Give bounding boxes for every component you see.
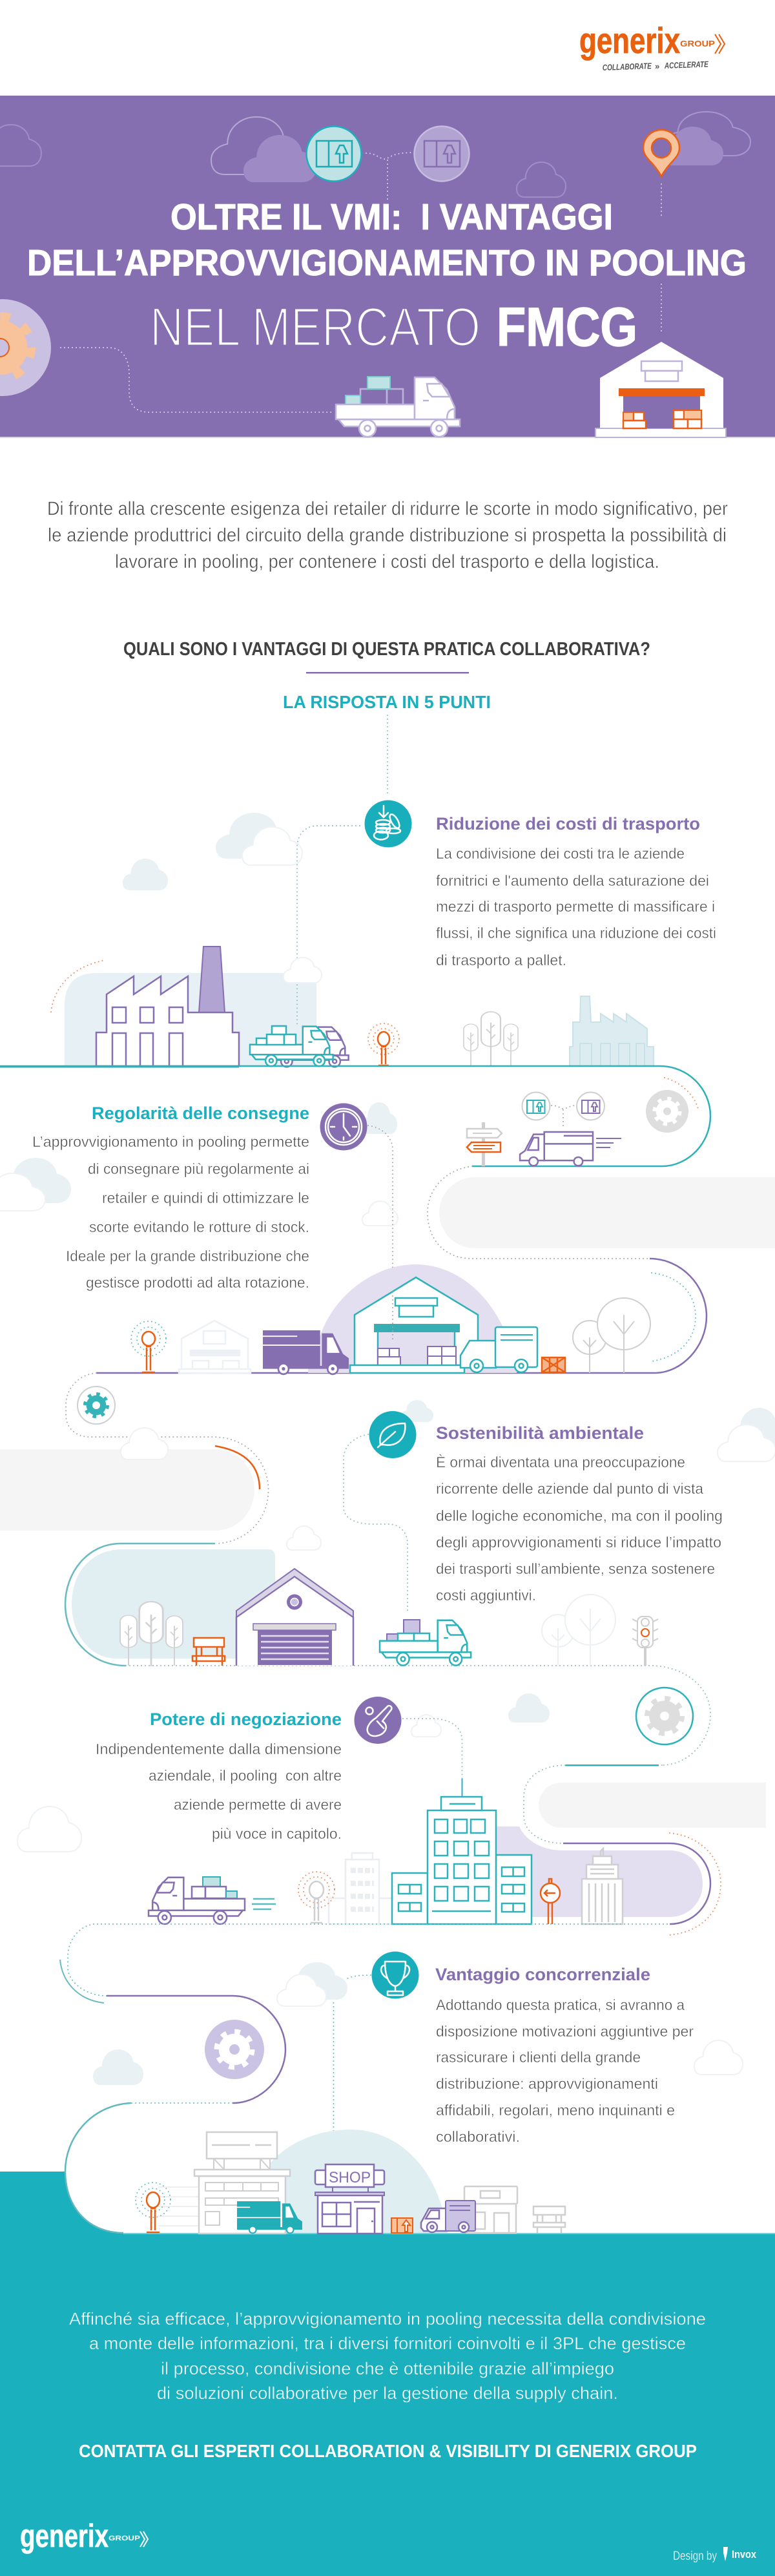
clouds [123, 813, 302, 890]
point 1 icon [364, 800, 412, 848]
point 1 text: di trasporto a pallet. [436, 952, 566, 969]
lamp [131, 1321, 166, 1372]
teal delivery truck [460, 1327, 537, 1372]
scene 2 lower: warehouse [131, 1264, 650, 1374]
header truck [336, 377, 460, 437]
call to action: CONTATTA GLI ESPERTI COLLABORATION & VISIBILITY DI GENERIX GROUP [79, 2441, 697, 2461]
logo top [579, 20, 725, 72]
teal van [237, 2201, 302, 2233]
point 2 icon [320, 1104, 367, 1150]
closing paragraph [69, 2309, 706, 2403]
gray pill [439, 1177, 775, 1248]
round trees [573, 1298, 650, 1373]
shop [315, 2164, 384, 2234]
outline van [520, 1132, 593, 1166]
signpost [467, 1122, 502, 1166]
road 1 [0, 1066, 710, 1166]
point 5 text: Adottando questa pratica, si avranno a [436, 1996, 685, 2013]
point 1 text: mezzi di trasporto permette di massificare i [436, 898, 715, 915]
footer logo: generix [20, 2518, 108, 2554]
lilac box circle [415, 127, 469, 181]
footer teal panel [0, 2103, 775, 2576]
point 3 heading: Sostenibilità ambientale [436, 1423, 644, 1443]
title: OLTRE IL VMI: I VANTAGGI [170, 196, 613, 238]
point 5 heading: Vantaggio concorrenziale [435, 1965, 650, 1984]
point 4 heading: Potere di negoziazione [150, 1710, 342, 1729]
three trees [120, 1602, 183, 1666]
point 2 text: retailer e quindi di ottimizzare le [102, 1189, 309, 1206]
point 1 text: flussi, il che significa una riduzione dei costi [436, 925, 716, 941]
gray skyscraper [582, 1848, 623, 1924]
header warehouse [595, 342, 726, 437]
question heading: QUALI SONO I VANTAGGI DI QUESTA PRATICA COLLABORATIVA? [123, 639, 650, 660]
point 3 text: degli approvvigionamenti si riduce l’impatto [436, 1534, 721, 1551]
bench [192, 1638, 225, 1666]
point 4 icon [354, 1697, 402, 1744]
point 3 text: costi aggiuntivi. [436, 1587, 536, 1604]
logo top: generix [579, 20, 680, 61]
faded factory [570, 996, 654, 1066]
purple garage [236, 1569, 353, 1666]
intro paragraph: le aziende produttrici del circuito della grande distribuzione si prospetta la possibilità di [48, 525, 727, 546]
point 2 text: di consegnare più regolarmente ai [88, 1160, 309, 1177]
footer logo: GROUP [108, 2535, 140, 2542]
scene 3 background and road [0, 1373, 775, 1765]
point 1 text: fornitrici e l'aumento della saturazione dei [436, 872, 709, 889]
lamp [136, 2183, 170, 2232]
teal truck 3 [380, 1620, 471, 1666]
scene 4: city [17, 1688, 766, 1996]
trucks [250, 1026, 349, 1067]
point 1 text [436, 845, 716, 969]
point 1 heading: Riduzione dei costi di trasporto [436, 814, 700, 833]
point 4 text: aziendale, il pooling con altre [149, 1767, 342, 1784]
box circles [522, 1092, 604, 1127]
gray gear [646, 1090, 688, 1133]
header banner [0, 96, 775, 438]
orange box [391, 2218, 413, 2233]
shop sign: SHOP [329, 2169, 371, 2186]
point 3 text [436, 1454, 723, 1604]
scene 5: shops [136, 2130, 565, 2234]
point 2 cloud and connector [0, 1102, 398, 1341]
point 2 text [32, 1133, 309, 1291]
closing paragraph: di soluzioni collaborative per la gestione della supply chain. [157, 2383, 618, 2403]
gray shopfront [464, 2186, 517, 2233]
design credit: Design by [673, 2550, 717, 2563]
point 2 text: gestisce prodotti ad alta rotazione. [86, 1274, 309, 1291]
lilac gear [205, 2020, 264, 2079]
gray office [158, 2132, 290, 2234]
intro paragraph: lavorare in pooling, per contenere i costi del trasporto e della logistica. [115, 551, 659, 572]
factory [96, 947, 239, 1066]
point 2 text: Ideale per la grande distribuzione che [66, 1248, 309, 1264]
point 4 text [96, 1741, 342, 1842]
title: FMCG [497, 297, 637, 357]
traffic light [632, 1617, 658, 1666]
lamp [368, 1023, 399, 1065]
point 4 text: più voce in capitolo. [212, 1825, 342, 1842]
trees [464, 1012, 518, 1066]
gear circle [0, 299, 51, 396]
point 4 text: Indipendentemente dalla dimensione [96, 1741, 342, 1757]
clouds [17, 1693, 550, 1852]
purple delivery truck [421, 2201, 475, 2232]
faded lamp [298, 1872, 335, 1923]
point 1 text: La condivisione dei costi tra le aziende [436, 845, 685, 862]
point 5 icon [372, 1951, 418, 1999]
point 2 text: L’approvvigionamento in pooling permette [32, 1133, 309, 1150]
logo top: » [655, 61, 659, 71]
point 2 text: scorte evitando le rotture di stock. [89, 1219, 309, 1235]
intro paragraph [47, 498, 728, 572]
logo top: COLLABORATE [603, 61, 652, 72]
point 3 text: ricorrente delle aziende dal punto di vista [436, 1480, 703, 1497]
scene 2 upper: van and signs [96, 1078, 775, 1373]
factory backdrop [65, 973, 316, 1066]
point 5 text: affidabili, regolari, meno inquinanti e [436, 2102, 675, 2119]
title [27, 196, 747, 357]
clouds [93, 1962, 743, 2085]
closing paragraph: il processo, condivisione che è ottenibile grazie all’impiego [161, 2359, 614, 2378]
scene 5 road [60, 1960, 743, 2159]
faded warehouse [179, 1321, 251, 1373]
point 5 text: rassicurare i clienti della grande [436, 2049, 641, 2066]
closing paragraph: a monte delle informazioni, tra i diversi fornitori coinvolti e il 3PL che gestisce [89, 2334, 686, 2353]
warehouse [350, 1277, 478, 1373]
closing paragraph: Affinché sia efficace, l’approvvigionamento in pooling necessita della condivisione [69, 2309, 706, 2329]
title: NEL MERCATO [150, 297, 480, 357]
purple truck [149, 1877, 245, 1924]
scene 1: factory road [0, 813, 710, 1166]
header dotted connectors [61, 152, 661, 412]
purple van [263, 1330, 349, 1374]
design credit [673, 2547, 756, 2563]
teal box circle [306, 127, 362, 181]
point 2 heading: Regolarità delle consegne [92, 1104, 309, 1123]
point 5 text: disposizione motivazioni aggiuntive per [436, 2023, 694, 2040]
orange sign [541, 1879, 560, 1924]
point 3 text: È ormai diventata una preoccupazione [436, 1454, 685, 1471]
teal buildings [392, 1797, 532, 1924]
point 3 text: delle logiche economiche, ma con il pooling [436, 1507, 723, 1524]
faded building [329, 1853, 393, 1924]
design credit: Invox [732, 2548, 756, 2560]
header clouds [0, 112, 750, 197]
point 3 icon [369, 1411, 416, 1458]
answer heading: LA RISPOSTA IN 5 PUNTI [283, 692, 491, 712]
point 5 text: collaborativi. [436, 2128, 520, 2145]
gray bench [533, 2206, 565, 2233]
right clouds [400, 1400, 775, 1461]
faded trees [542, 1595, 615, 1666]
logo top: ACCELERATE [664, 59, 708, 70]
point 3 text: dei trasporti sull’ambiente, senza sostenere [436, 1560, 715, 1577]
point 5 text: distribuzione: approvvigionamenti [436, 2075, 658, 2092]
teal gear [78, 1387, 115, 1424]
orange crate [542, 1357, 565, 1372]
point 4 text: aziende permette di avere [174, 1796, 342, 1813]
gear circle [636, 1688, 693, 1744]
point 5 text [436, 1996, 694, 2145]
location pin [643, 130, 679, 176]
logo top: GROUP [680, 39, 715, 48]
